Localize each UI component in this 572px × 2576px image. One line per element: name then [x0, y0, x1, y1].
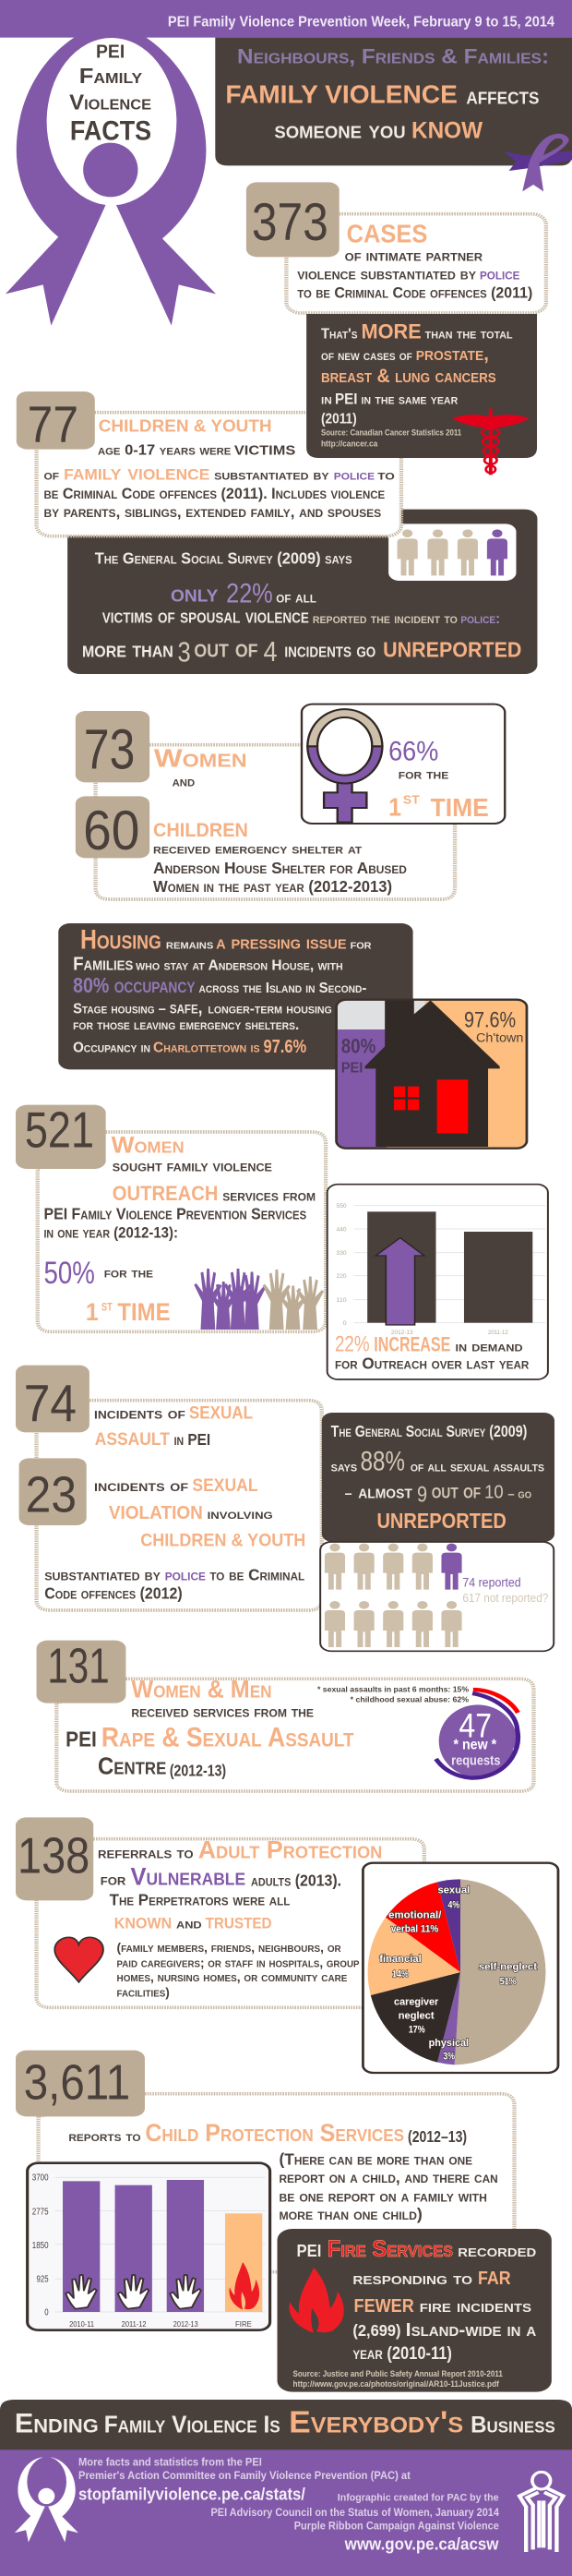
- bar chart: child protection reports versus fire incidents: 0: [44, 2307, 49, 2317]
- text: children and youth description: substantiated by: [214, 466, 329, 483]
- text: general social survey: of all: [276, 589, 316, 607]
- note: sexual assault details: [317, 1685, 470, 1704]
- panel: housing remains a pressing issue: who stay at Anderson House, with: [136, 957, 343, 973]
- pie chart: adult protection referral types: [363, 1863, 558, 2073]
- text: incidents: CHILDREN & YOUTH: [140, 1531, 305, 1550]
- panel: more than cancer cases: http://cancer.ca: [321, 439, 378, 449]
- bar chart: child protection reports versus fire incidents: 2775: [32, 2207, 49, 2217]
- callout: 66 percent for the first time: TIME: [431, 792, 489, 822]
- text: general social survey: out of: [194, 633, 258, 663]
- text: children and youth description: of: [43, 466, 59, 483]
- panel: 88 percent unreported: – go: [507, 1487, 531, 1501]
- text: more facts and URL: Premier's Action Committee on Family Violence Prevention (PAC) at: [78, 2469, 411, 2482]
- text: children and youth description: [43, 416, 395, 521]
- text: children and youth description: be Criminal Code offences (2011). Includes violence: [43, 485, 385, 502]
- text: general social survey: UNREPORTED: [383, 639, 521, 662]
- note: sexual assault details: * sexual assaults in past 6 months: 15%: [317, 1685, 470, 1694]
- panel: 73 women and 60 children: [76, 704, 505, 899]
- panel: 88 percent unreported: 88%: [361, 1445, 405, 1476]
- text: referrals: (family members, friends, neighbours, or: [117, 1941, 341, 1956]
- text: outreach services: for the: [104, 1264, 153, 1281]
- panel: housing remains a pressing issue: Occupancy in: [73, 1039, 150, 1055]
- panel: fire services: Source: Justice and Public Safety Annual Report 2010-2011: [293, 2370, 503, 2379]
- text: general social survey: reported the incident to: [313, 609, 458, 627]
- text: cases description: police: [480, 265, 520, 283]
- icons: white hands: [66, 2275, 201, 2309]
- panel: housing remains a pressing issue: longer-term housing: [208, 1000, 332, 1017]
- pie chart: adult protection referral types: 17%: [409, 2024, 425, 2035]
- text: referrals: TRUSTED: [206, 1914, 272, 1932]
- text: women and children shelter: children: [153, 812, 248, 842]
- number box: 73: 73: [84, 718, 135, 781]
- text: children and youth description: age 0-17 years were: [98, 441, 231, 458]
- icon: advisory council logo: [519, 2472, 564, 2552]
- bar chart: child protection reports versus fire incidents: 925: [37, 2274, 49, 2284]
- text: women and children shelter: Anderson House Shelter for Abused: [153, 860, 407, 878]
- panel: more than cancer cases: Source: Canadian Cancer Statistics 2011: [321, 428, 462, 438]
- text: credits: www.gov.pe.ca/acsw: [344, 2534, 499, 2554]
- text: women and children shelter: received emergency shelter at: [153, 840, 363, 857]
- text: outreach services: ST: [101, 1300, 113, 1313]
- number box: 521: 521: [25, 1101, 94, 1159]
- text: reports to child protection services: be one report on a family with: [279, 2188, 487, 2206]
- text: children and youth description: by parents, siblings, extended family, and spouses: [43, 503, 382, 521]
- text: incidents: substantiated by: [44, 1567, 161, 1584]
- panel: fire services: FAR: [478, 2267, 511, 2289]
- panel: more than cancer cases: than the total: [425, 325, 513, 342]
- text: services received: [66, 1677, 354, 1780]
- chart: house occupancy comparison: Ch'town: [476, 1030, 523, 1045]
- text: general social survey: police:: [460, 609, 500, 627]
- text: referrals: The Perpetrators were all: [110, 1892, 290, 1909]
- text: referrals: adults (2013).: [251, 1872, 341, 1890]
- text: services received: received services from the: [131, 1703, 314, 1720]
- text: children and youth description: CHILDREN & YOUTH: [99, 416, 272, 436]
- icon: 47 new requests circle: requests: [451, 1753, 501, 1768]
- bar chart: outreach demand 22 percent increase: in demand: [455, 1338, 523, 1354]
- text: referrals: Vulnerable: [131, 1864, 245, 1891]
- text: incidents: VIOLATION: [109, 1502, 203, 1523]
- text: referrals: and: [176, 1915, 202, 1932]
- bar chart: outreach demand 22 percent increase: 2012-13: [391, 1329, 413, 1336]
- panel: 88 percent unreported: out of: [432, 1480, 481, 1503]
- number box: 74: 74: [24, 1375, 77, 1433]
- callout: 66 percent for the first time: [302, 704, 505, 824]
- bar chart: child protection reports versus fire incidents: 2011-12: [122, 2320, 147, 2329]
- icon: female symbol half filled: [307, 709, 382, 823]
- heading: PEI Family Violence Facts: [69, 41, 151, 146]
- text: general social survey: 3: [178, 637, 191, 668]
- text: referrals: facilities): [117, 1986, 170, 2000]
- text: incidents: [44, 1403, 305, 1603]
- icon: red heart: [54, 1937, 103, 1982]
- text: referrals: referrals to: [98, 1845, 194, 1862]
- panel: 3,611 reports to child protection: [16, 2051, 515, 2272]
- pie chart: adult protection referral types: financial: [379, 1953, 422, 1965]
- icon: red caduceus: [452, 409, 529, 475]
- panel: 131 women and men: [37, 1639, 533, 1791]
- panel: 88 percent unreported: almost: [358, 1481, 412, 1502]
- text: more facts and URL: [78, 2456, 411, 2504]
- text: outreach services: sought family violence: [113, 1157, 272, 1174]
- panel: more than cancer cases: MORE: [361, 321, 422, 343]
- text: incidents: incidents of: [94, 1405, 185, 1423]
- text: incidents: SEXUAL: [189, 1403, 253, 1423]
- panel: 138 referrals to adult protection: [16, 1817, 424, 2007]
- heading: PEI Family Violence Facts: FACTS: [70, 115, 151, 146]
- number box: 77: 77: [28, 395, 78, 452]
- text: credits: Purple Ribbon Campaign Against Violence: [294, 2519, 499, 2532]
- icon: four people, one purple: [388, 524, 517, 581]
- panel: housing remains a pressing issue: Housing: [80, 924, 161, 955]
- header banner: [0, 0, 572, 38]
- panel: fire services: http://www.gov.pe.ca/photos/original/AR10-11Justice.pdf: [293, 2380, 500, 2389]
- callout: 66 percent for the first time: ST: [403, 794, 420, 807]
- pie chart: adult protection referral types: self-neglect: [479, 1960, 537, 1972]
- panel: fire services: responding to: [352, 2269, 472, 2289]
- text: incidents: Code offences (2012): [44, 1585, 183, 1603]
- number box: 521: [16, 1101, 106, 1169]
- panel: 88 percent unreported: 9: [417, 1482, 427, 1507]
- text: outreach services: OUTREACH: [113, 1183, 218, 1205]
- icon: 47 new requests circle: [436, 1690, 518, 1784]
- text: reports to child protection services: (There can be more than one: [279, 2151, 472, 2169]
- number box: 373: 373: [252, 193, 328, 252]
- text: outreach services: 1: [86, 1299, 99, 1326]
- bar chart: outreach demand 22 percent increase: 220: [337, 1272, 347, 1280]
- icon grid: ten people, one purple: [320, 1542, 554, 1651]
- panel: fire services: [278, 2229, 552, 2392]
- pie chart: adult protection referral types: caregiver: [394, 1996, 438, 2007]
- text: outreach services: in one year (2012-13):: [43, 1223, 178, 1241]
- text: services received: PEI: [66, 1728, 97, 1751]
- text: incidents: to be Criminal: [209, 1567, 304, 1584]
- panel: 88 percent unreported: [322, 1413, 554, 1542]
- icon: large flame: [289, 2268, 344, 2333]
- text: referrals: [98, 1837, 382, 2000]
- text: general social survey: only: [171, 581, 219, 608]
- panel: family violence affects someone you know: [215, 38, 572, 165]
- panel: housing remains a pressing issue: for those leaving emergency shelters.: [73, 1016, 299, 1033]
- text: reports to child protection services: [68, 2120, 498, 2224]
- chart: house occupancy comparison: 80%: [341, 1036, 375, 1058]
- text: cases description: violence substantiated by: [297, 265, 476, 283]
- panel: more than cancer cases: prostate,: [416, 343, 489, 365]
- text: children and youth description: victims: [234, 438, 296, 459]
- panel: housing remains a pressing issue: [58, 923, 413, 1069]
- icon: raised hands: [194, 1269, 324, 1330]
- text: outreach services: 50%: [43, 1256, 95, 1291]
- text: incidents: ASSAULT: [95, 1430, 170, 1450]
- bar chart: outreach demand 22 percent increase: 0: [343, 1319, 347, 1327]
- bar chart: child protection reports versus fire incidents: [28, 2163, 270, 2330]
- text: referrals: Adult Protection: [198, 1837, 382, 1864]
- panel: family violence affects someone you know: FAMILY VIOLENCE: [225, 79, 458, 109]
- panel: fire services: Fire Services: [328, 2235, 453, 2261]
- bar chart: outreach demand 22 percent increase: for Outreach over last year: [335, 1355, 530, 1373]
- pie chart: adult protection referral types: 4%: [448, 1899, 459, 1910]
- callout: 66 percent for the first time: 1: [388, 792, 401, 822]
- panel: more than cancer cases: [306, 314, 537, 458]
- text: reports to child protection services: reports to: [68, 2127, 141, 2145]
- text: outreach services: Women: [112, 1132, 185, 1158]
- text: outreach services: TIME: [117, 1299, 171, 1326]
- panel: 88 percent unreported: 10: [484, 1481, 504, 1502]
- chart: house occupancy comparison: [337, 1000, 527, 1149]
- text: children and youth description: family violence: [64, 459, 209, 485]
- callout: 66 percent for the first time: 66%: [388, 735, 438, 766]
- panel: housing remains a pressing issue: across the Island in Second-: [198, 979, 367, 996]
- icon grid: ten people, one purple: 74 reported: [462, 1575, 521, 1590]
- panel: housing remains a pressing issue: safe,: [170, 996, 202, 1017]
- panel: 88 percent unreported: –: [345, 1485, 352, 1501]
- bar chart: child protection reports versus fire incidents: 1850: [32, 2241, 49, 2251]
- text: referrals: homes, nursing homes, or community care: [117, 1970, 347, 1985]
- text: credits: [211, 2491, 499, 2554]
- panel: 88 percent unreported: UNREPORTED: [376, 1510, 506, 1533]
- pie chart: adult protection referral types: 3%: [443, 2051, 455, 2062]
- icon: small purple ribbon: [504, 134, 572, 191]
- number box: 131: [37, 1639, 125, 1703]
- panel: 22 percent unreported: [67, 510, 537, 674]
- pie chart: adult protection referral types: 51%: [500, 1975, 517, 1987]
- panel: 88 percent unreported: says: [331, 1458, 357, 1475]
- arrow: upward increase: [375, 1238, 424, 1325]
- text: outreach services: services from: [222, 1186, 316, 1204]
- panel: more than cancer cases: in: [321, 391, 332, 407]
- number box: 3,611: [16, 2051, 145, 2116]
- bar chart: outreach demand 22 percent increase: INCREASE: [374, 1333, 450, 1356]
- bar chart: outreach demand 22 percent increase: 22%: [335, 1330, 370, 1356]
- text: women and children shelter: and: [173, 773, 195, 789]
- panel: family violence affects someone you know: someone you: [274, 117, 406, 144]
- bar chart: outreach demand 22 percent increase: 440: [337, 1225, 347, 1233]
- banner: ending family violence is everybody's business: Everybody's: [289, 2404, 463, 2439]
- text: more facts and URL: stopfamilyviolence.pe.ca/stats/: [78, 2485, 305, 2504]
- pie chart: adult protection referral types: 14%: [392, 1968, 409, 1980]
- text: women and children shelter: Women in the past year (2012-2013): [153, 878, 392, 897]
- pie chart: adult protection referral types: emotional/: [388, 1908, 442, 1920]
- text: reports to child protection services: more than one child): [279, 2206, 423, 2224]
- text: general social survey: [82, 550, 521, 668]
- heading: PEI Family Violence Facts: Family: [79, 65, 143, 88]
- panel: more than cancer cases: (2011): [321, 410, 357, 427]
- text: general social survey: The General Social Survey (2009) says: [95, 550, 352, 568]
- text: services received: Women & Men: [131, 1677, 272, 1703]
- panel: fire services: PEI: [296, 2242, 321, 2261]
- pie chart: adult protection referral types: neglect: [399, 2010, 435, 2021]
- text: general social survey: incidents go: [284, 640, 375, 662]
- text: cases description: CASES: [347, 219, 427, 248]
- number box: 138: 138: [18, 1826, 89, 1884]
- text: more facts and URL: More facts and statistics from the PEI: [78, 2456, 262, 2468]
- panel: family violence affects someone you know: Neighbours, Friends & Families:: [237, 45, 549, 68]
- text: incidents: police: [165, 1567, 206, 1584]
- text: general social survey: victims of spousal violence: [102, 604, 309, 628]
- banner: ending family violence is everybody's business: [0, 2400, 572, 2450]
- number box: 23: 23: [26, 1465, 77, 1523]
- text: reports to child protection services: report on a child, and there can: [279, 2169, 498, 2187]
- text: general social survey: more than: [82, 636, 173, 662]
- bar chart: outreach demand 22 percent increase: 550: [337, 1202, 347, 1210]
- icon: white ribbon: [15, 2457, 78, 2542]
- panel: more than cancer cases: in the same year: [361, 391, 459, 407]
- text: outreach services: [43, 1132, 316, 1326]
- text: referrals: paid caregivers; or staff in hospitals, group: [117, 1956, 359, 1970]
- panel: fire services: (2,699): [352, 2322, 401, 2341]
- text: women and children shelter: Women: [154, 743, 247, 773]
- heading: PEI Family Violence Facts: PEI: [96, 41, 125, 62]
- panel: housing remains a pressing issue: 97.6%: [263, 1035, 306, 1057]
- bar chart: child protection reports versus fire incidents: 3700: [32, 2173, 49, 2183]
- pie chart: adult protection referral types: verbal 11%: [391, 1923, 438, 1934]
- door and window: [394, 1079, 468, 1134]
- pie chart: adult protection referral types: physical: [429, 2037, 469, 2049]
- text: incidents: incidents of: [94, 1477, 188, 1496]
- panel: more than cancer cases: That's: [321, 325, 358, 342]
- bar chart: outreach demand 22 percent increase: 110: [337, 1296, 347, 1304]
- panel: housing remains a pressing issue: for: [351, 937, 372, 952]
- panel: more than cancer cases: PEI: [335, 390, 357, 407]
- bar chart: child protection reports versus fire incidents: FIRE: [235, 2320, 252, 2329]
- text: reports to child protection services: Child Protection Services: [145, 2120, 404, 2147]
- panel: more than cancer cases: breast & lung cancers: [321, 365, 496, 387]
- chart: house occupancy comparison: PEI: [341, 1060, 363, 1076]
- text: incidents: in PEI: [174, 1431, 210, 1450]
- icon: small flame: [229, 2262, 259, 2310]
- bar chart: outreach demand 22 percent increase: 330: [337, 1249, 347, 1257]
- text: services received: Centre: [98, 1753, 166, 1780]
- icon: 47 new requests circle: 47: [459, 1707, 492, 1745]
- text: general social survey: 4: [263, 637, 278, 668]
- panel: housing remains a pressing issue: Families: [73, 953, 134, 974]
- text: services received: Rape & Sexual Assault: [101, 1722, 354, 1752]
- text: reports to child protection services: (2012–13): [408, 2128, 467, 2147]
- panel: housing remains a pressing issue: a pressing issue: [216, 932, 347, 953]
- panel: housing remains a pressing issue: remains: [166, 938, 213, 952]
- number box: 131: 131: [47, 1639, 110, 1694]
- text: outreach services: PEI Family Violence Prevention Services: [43, 1205, 306, 1223]
- text: general social survey: 22%: [226, 577, 273, 608]
- text: cases description: of intimate partner: [345, 247, 483, 264]
- bar chart: child protection reports versus fire incidents: 2012-13: [173, 2320, 198, 2329]
- text: referrals: for: [101, 1872, 126, 1889]
- panel: more than cancer cases: of new cases of: [321, 346, 412, 364]
- panel: 77 children and youth: [17, 391, 401, 536]
- panel: 373 cases: [246, 182, 546, 313]
- note: sexual assault details: * childhood sexual abuse: 62%: [351, 1695, 470, 1704]
- panel: fire services: fire incidents: [420, 2297, 531, 2317]
- bar chart: outreach demand 22 percent increase: [328, 1185, 548, 1379]
- panel: housing remains a pressing issue: 80% occupancy: [73, 974, 196, 997]
- text: incidents: SEXUAL: [192, 1476, 258, 1496]
- number box: 3,611: 3,611: [24, 2055, 130, 2110]
- banner: ending family violence is everybody's business: Ending: [15, 2408, 99, 2438]
- text: children and youth description: police: [334, 466, 375, 483]
- panel: fire services: recorded: [458, 2242, 536, 2261]
- text: referrals: KNOWN: [114, 1914, 172, 1932]
- pie chart: adult protection referral types: sexual: [437, 1884, 470, 1896]
- panel: 74 and 23 sexual assault incidents: [16, 1366, 322, 1610]
- panel: 521 women outreach: [16, 1101, 326, 1331]
- text: incidents: involving: [208, 1505, 273, 1523]
- bar chart: outreach demand 22 percent increase: 2011-12: [488, 1329, 508, 1336]
- callout: 66 percent for the first time: for the: [399, 765, 448, 782]
- icon: large purple ribbon with figure: [6, 28, 216, 326]
- icon: 47 new requests circle: * new *: [453, 1737, 497, 1752]
- number box: 138: [16, 1817, 93, 1900]
- text: children and youth description: to: [377, 466, 395, 483]
- panel: family violence affects someone you know: affects: [466, 83, 539, 110]
- text: services received: (2012-13): [170, 1763, 226, 1780]
- banner: ending family violence is everybody's business: Family Violence Is: [104, 2412, 280, 2438]
- panel: fire services: year (2010-11): [352, 2344, 452, 2364]
- bar chart: child protection reports versus fire incidents: 2010-11: [69, 2320, 94, 2329]
- chart: house occupancy comparison: 97.6%: [464, 1007, 516, 1032]
- panel: housing remains a pressing issue: Stage housing –: [73, 1000, 166, 1017]
- number box: 60: 60: [83, 799, 139, 861]
- icon grid: ten people, one purple: 617 not reported?: [462, 1591, 549, 1605]
- number box: 373: [246, 182, 340, 257]
- heading: PEI Family Violence Facts: Violence: [69, 90, 151, 114]
- panel: family violence affects someone you know: KNOW: [411, 117, 483, 143]
- text: women and children shelter: [153, 743, 407, 897]
- panel: fire services: Island-wide in a: [406, 2318, 537, 2341]
- panel: housing remains a pressing issue: Charlottetown is: [153, 1039, 260, 1055]
- text: credits: Infographic created for PAC by the: [338, 2491, 499, 2503]
- panel: fire services: FEWER: [354, 2294, 414, 2317]
- banner: ending family violence is everybody's business: Business: [471, 2412, 555, 2438]
- text: cases description: [297, 219, 532, 301]
- footer: [0, 2450, 572, 2576]
